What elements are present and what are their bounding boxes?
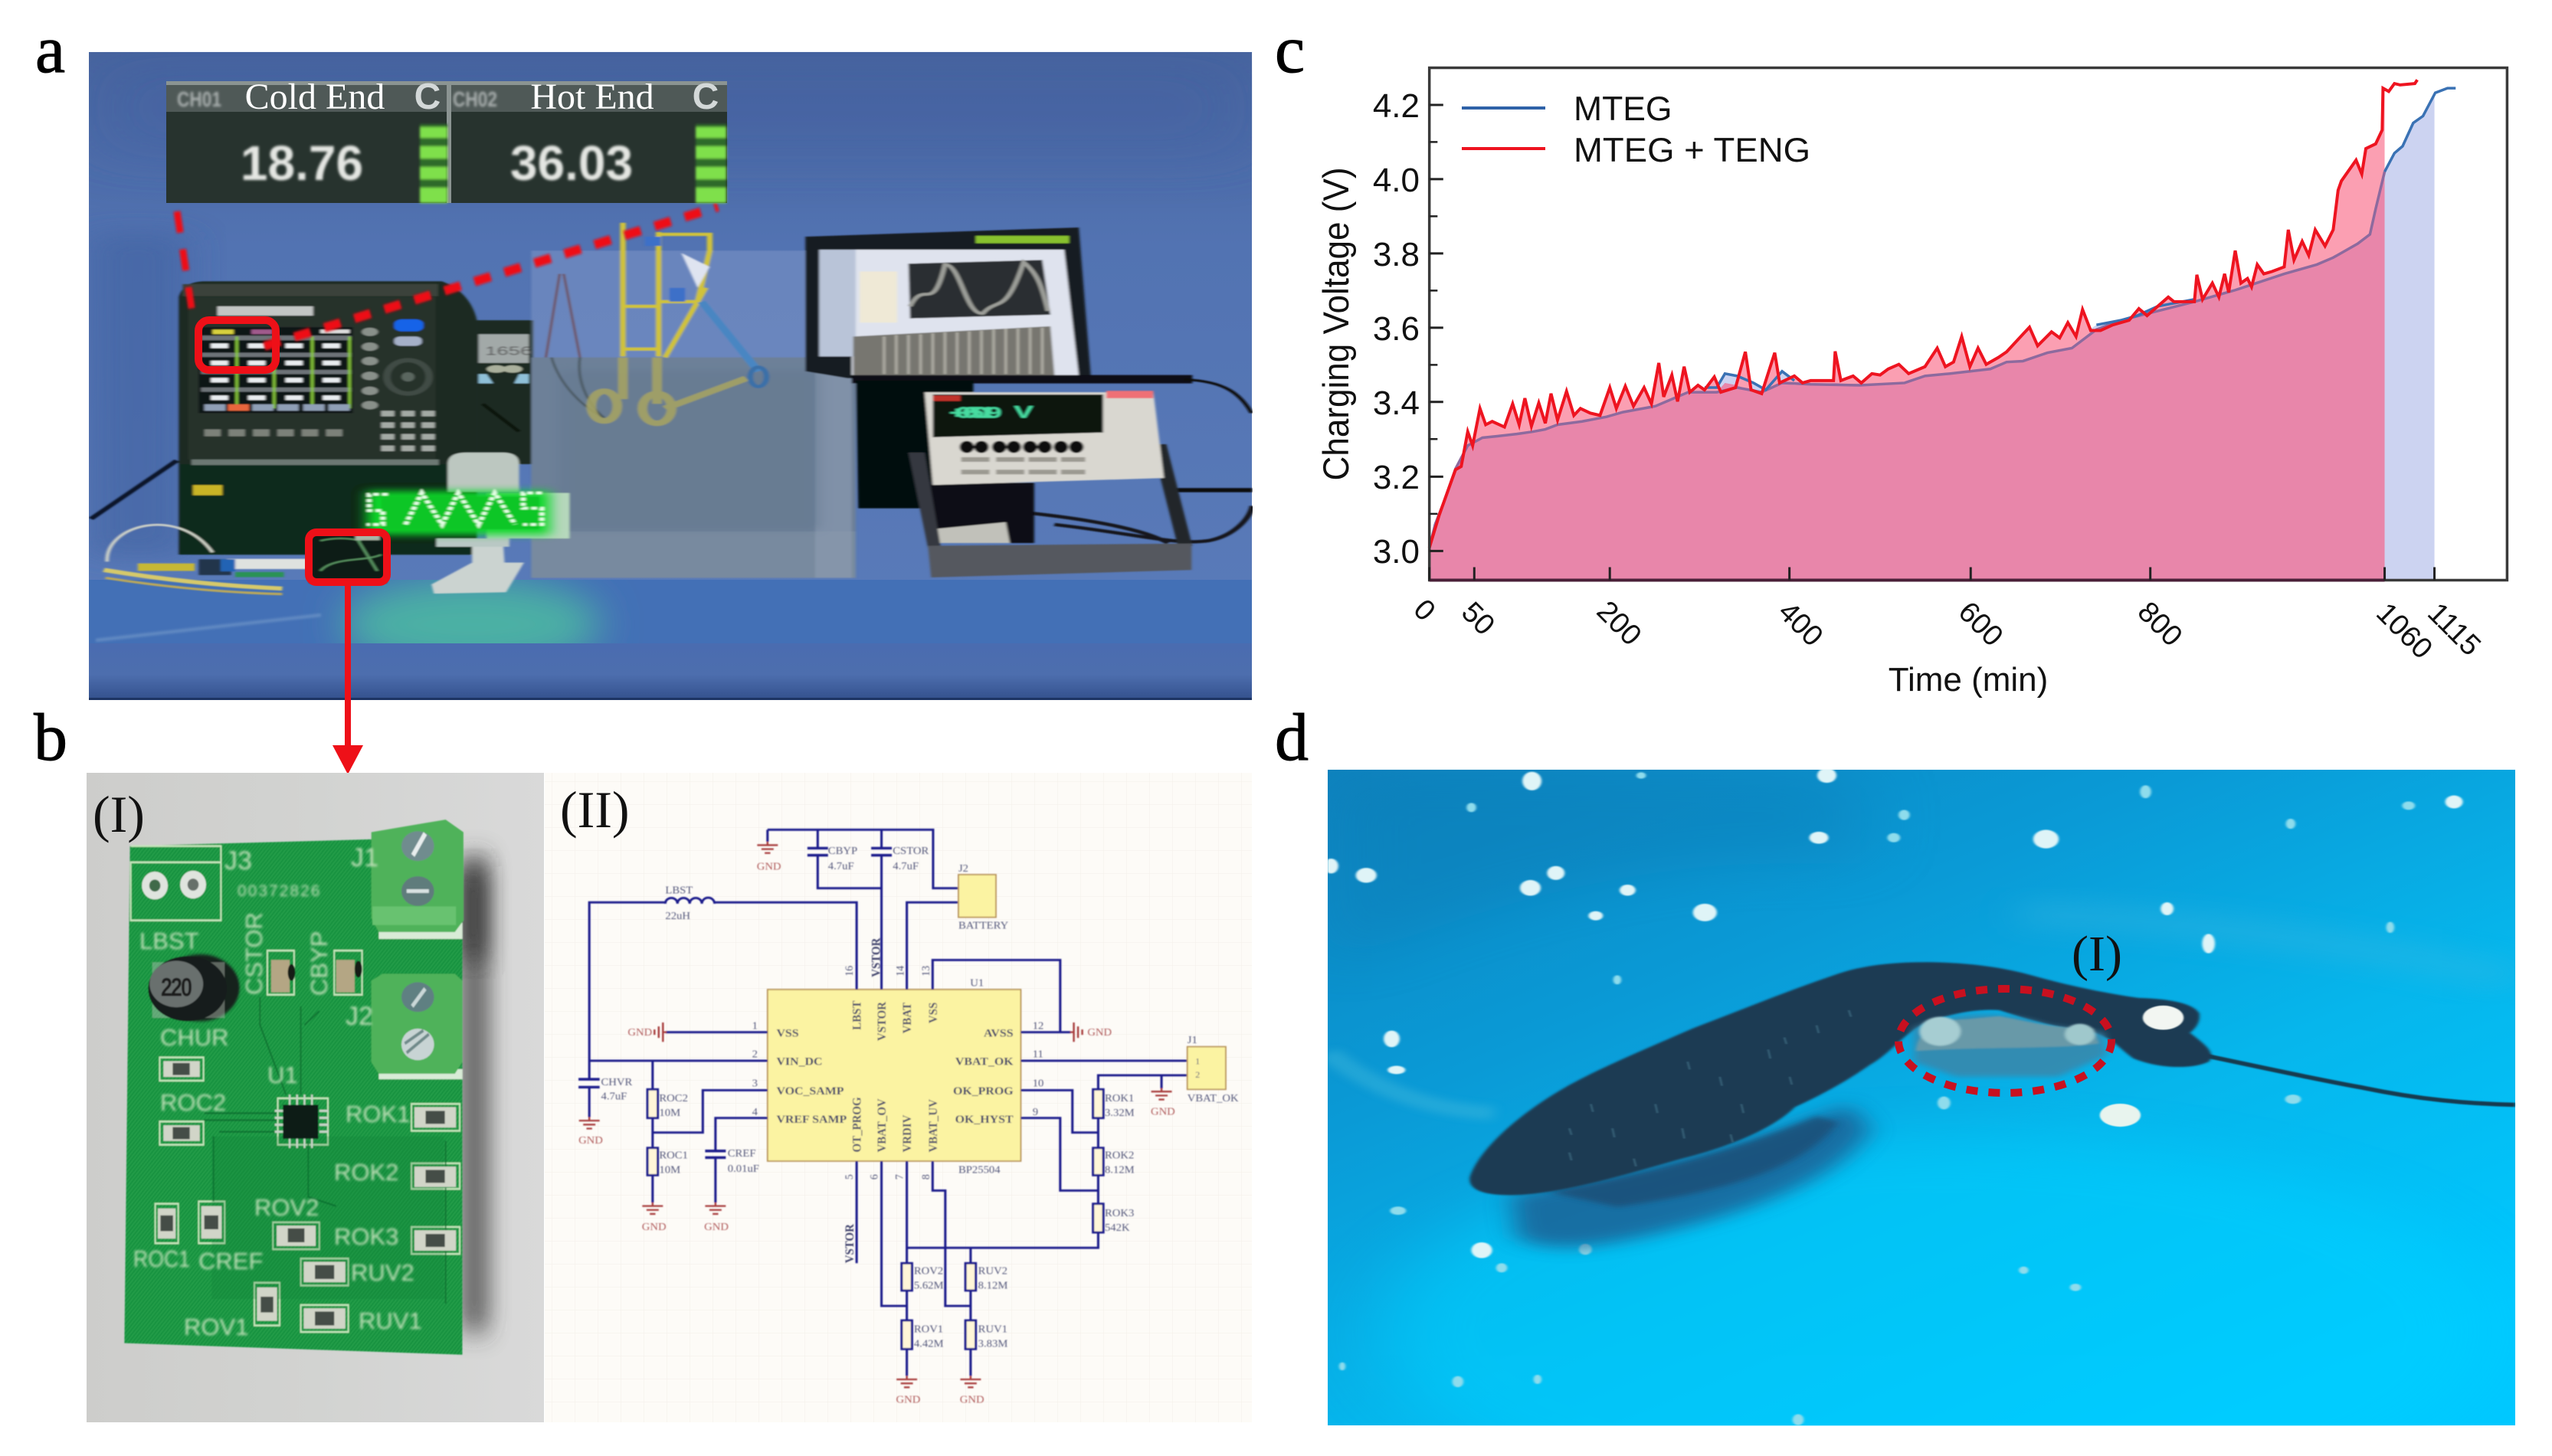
schematic text labels: VSS	[776, 1027, 799, 1039]
panel b(II): circuit schematic: 8.12M	[1105, 1164, 1135, 1176]
y-axis tick labels: 3.8	[1373, 236, 1420, 273]
value: hot end temperature: 36.03	[510, 136, 633, 191]
panel b(II): circuit schematic: LBST	[665, 885, 693, 897]
panel b(II): circuit schematic: GND	[578, 1134, 603, 1147]
terminal block J1	[372, 820, 464, 939]
panel b(II): circuit schematic	[545, 773, 1252, 1422]
schematic text labels: VBAT_OV	[876, 1098, 889, 1152]
line: MTEG	[1430, 88, 2455, 548]
silkscreen labels: J2	[346, 1002, 373, 1031]
y-axis tick labels: 3.2	[1373, 459, 1420, 496]
rat body	[1469, 962, 2211, 1195]
panel b(II): circuit schematic: 4.7uF	[828, 860, 854, 872]
panel b(II): circuit schematic: GND	[704, 1222, 729, 1233]
y-axis tick labels	[1373, 87, 1420, 571]
silkscreen labels: CREF	[198, 1248, 263, 1274]
air bubbles	[1324, 768, 2463, 1425]
sub-panel label: b(II): (II)	[560, 780, 630, 839]
heading: Hot End: Hot End	[530, 77, 654, 117]
panel b(II): circuit schematic: 10M	[659, 1107, 680, 1119]
silkscreen labels: ROV2	[254, 1194, 319, 1221]
silkscreen labels: U1	[267, 1062, 298, 1088]
panel b(II): circuit schematic: BP25504	[958, 1164, 1001, 1176]
schematic text labels: VRDIV	[901, 1115, 914, 1152]
circuit wiring	[578, 829, 1188, 1376]
x-axis tick labels: 1060	[2370, 597, 2439, 666]
schematic text labels: AVSS	[984, 1027, 1014, 1039]
x-axis tick labels: 50	[1455, 596, 1501, 642]
panel label: a: a	[35, 13, 65, 87]
panel b(II): circuit schematic: 542K	[1105, 1222, 1130, 1234]
panel b(II): circuit schematic: RUV2	[978, 1265, 1007, 1278]
y-axis title: Charging Voltage (V)	[1315, 167, 1356, 481]
panel label: b: b	[34, 701, 67, 775]
red dashed circle	[1898, 989, 2111, 1093]
area under MTEG + TENG	[1430, 88, 2385, 580]
panel b(II): circuit schematic: GND	[642, 1222, 667, 1233]
schematic text labels: VREF SAMP	[776, 1113, 847, 1126]
tether cable	[2203, 1055, 2515, 1104]
digital multimeter with stand	[909, 380, 1253, 577]
panel b(II): circuit schematic: ROK2	[1105, 1150, 1134, 1161]
area under MTEG	[1430, 95, 2435, 581]
panel b(II): circuit schematic: 2	[752, 1049, 758, 1060]
silkscreen labels: ROV1	[184, 1314, 248, 1340]
panel b(II): circuit schematic: GND	[1087, 1027, 1112, 1039]
panel b(II): circuit schematic: 4.42M	[914, 1338, 944, 1350]
callout label (I): (I)	[2072, 926, 2122, 982]
panel b(II): circuit schematic: GND	[757, 861, 781, 872]
SMD components	[158, 960, 456, 1329]
panel b(II): circuit schematic: CREF	[728, 1148, 756, 1160]
digital multimeter with stand: V	[1014, 403, 1034, 421]
panel b(II): circuit schematic: 8.12M	[978, 1280, 1008, 1291]
inductor LBST: 220	[161, 973, 192, 1002]
inset: temperature readout	[166, 77, 727, 203]
J3 connector pads	[142, 871, 206, 899]
panel b(II): circuit schematic: 4	[752, 1107, 758, 1118]
x-axis tick labels: 600	[1952, 596, 2009, 653]
schematic text labels: OK_HYST	[955, 1113, 1014, 1126]
LED array display on stand	[367, 453, 569, 594]
x-axis tick labels	[1407, 594, 2487, 666]
silkscreen labels: ROC2	[160, 1089, 226, 1116]
schematic text labels: VBAT_OK	[955, 1055, 1014, 1068]
y-axis tick labels: 3.4	[1373, 384, 1420, 422]
panel b(II): circuit schematic: ROC2	[659, 1092, 688, 1104]
panel b(II): circuit schematic: 4.7uF	[601, 1091, 627, 1102]
IC U1	[275, 1094, 329, 1148]
panel b(II): circuit schematic: GND	[627, 1027, 652, 1039]
water tank with fish robot	[531, 223, 856, 577]
x-axis tick labels: 800	[2131, 596, 2188, 653]
panel b(II): circuit schematic: ROK1	[1105, 1092, 1134, 1104]
rat shadow	[1510, 1104, 1870, 1248]
panel b(II): circuit schematic: ROK3	[1105, 1207, 1134, 1219]
silkscreen labels: CSTOR	[241, 912, 267, 995]
panel b(II): circuit schematic: VBAT_OK	[1188, 1092, 1239, 1104]
y-axis tick labels: 3.0	[1373, 533, 1420, 571]
panel b(II): circuit schematic: 3.83M	[978, 1338, 1008, 1350]
water gradient bands	[1328, 770, 2515, 1456]
schematic text labels: OT_PROG	[850, 1097, 864, 1152]
schematic text labels: VIN_DC	[776, 1055, 823, 1068]
panel b(II): circuit schematic: GND	[960, 1394, 984, 1405]
silkscreen labels: ROK1	[346, 1101, 410, 1127]
laptop with waveform	[805, 227, 1192, 509]
schematic text labels: VSTOR	[876, 1001, 889, 1041]
channel tag CH01: CH01	[177, 87, 221, 111]
schematic text labels	[776, 937, 1014, 1263]
schematic text labels: VSTOR	[870, 937, 883, 977]
red highlight box: circuit	[309, 532, 387, 582]
fur speckles	[1569, 1010, 1851, 1166]
panel b(II): circuit schematic: 1	[752, 1020, 758, 1032]
panel b(II): circuit schematic: 16	[844, 966, 856, 977]
silkscreen labels: J1	[351, 843, 378, 872]
panel a: experimental setup photo	[89, 52, 1253, 700]
panel b(II): circuit schematic: 14	[894, 966, 906, 977]
wires and clips on the table	[91, 460, 308, 594]
resistor symbols	[647, 1089, 1103, 1349]
x-axis title: Time (min)	[1889, 661, 2048, 699]
legend: MTEG + TENG	[1574, 132, 1810, 169]
line: MTEG + TENG	[1430, 80, 2417, 548]
silkscreen labels: ROC1	[133, 1245, 190, 1272]
panel b(II): circuit schematic: GND	[896, 1394, 920, 1405]
data logger instrument	[179, 281, 534, 555]
unit glyph: C	[693, 77, 719, 117]
x-axis tick labels: 400	[1772, 596, 1829, 653]
inductor LBST	[148, 954, 240, 1021]
legend: MTEG	[1574, 90, 1672, 128]
legend	[1462, 90, 1810, 169]
overlap area	[1430, 172, 2385, 581]
schematic text labels: VBAT_UV	[926, 1099, 940, 1152]
channel tag CH02: CH02	[453, 87, 497, 111]
panel b(II): circuit schematic: 6	[868, 1174, 881, 1180]
panel label: c: c	[1275, 13, 1305, 87]
digital multimeter with stand: +005.019	[949, 404, 1001, 421]
sub-panel label: b(I): (I)	[93, 785, 145, 843]
panel b(II): circuit schematic: 10M	[659, 1164, 680, 1176]
implant region	[1913, 1015, 2107, 1077]
x-axis tick labels: 0	[1407, 594, 1441, 627]
schematic text labels: OK_PROG	[953, 1085, 1014, 1098]
terminal block J2	[372, 973, 462, 1079]
panel c: charging voltage chart	[1315, 67, 2507, 699]
schematic text labels: LBST	[850, 1000, 864, 1030]
x-axis tick labels: 200	[1590, 595, 1647, 652]
panel b(II): circuit schematic: 0.01uF	[728, 1163, 759, 1175]
panel b(II): circuit schematic: 3.32M	[1105, 1107, 1135, 1119]
PCB under test with wires	[310, 532, 386, 584]
data logger instrument: 1656	[485, 345, 532, 358]
arrow: circuit to panel b	[333, 585, 363, 774]
panel b(II): circuit schematic: CSTOR	[893, 845, 929, 857]
panel b(II): circuit schematic: U1	[970, 977, 984, 989]
panel b(II): circuit schematic: ROC1	[659, 1150, 688, 1161]
chart axes frame and ticks	[1430, 67, 2507, 580]
red dashed zoom guide lines	[177, 207, 718, 346]
silkscreen labels: CBYP	[306, 931, 333, 996]
silkscreen labels: CHUR	[160, 1024, 229, 1051]
schematic text labels: VSS	[926, 1003, 940, 1023]
panel b(II): circuit schematic: 5	[844, 1174, 856, 1180]
y-axis tick labels: 4.0	[1373, 162, 1420, 199]
panel b(II): circuit schematic: 22uH	[665, 910, 690, 922]
panel b(I): PCB photo	[87, 773, 544, 1422]
chip U1	[768, 990, 1020, 1161]
bubble near head	[2100, 1104, 2141, 1127]
silkscreen labels: ROK2	[334, 1159, 398, 1186]
panel b(II): circuit schematic: GND	[1151, 1106, 1175, 1118]
panel b(II): circuit schematic: CBYP	[828, 845, 857, 857]
silkscreen labels: ROK3	[334, 1223, 398, 1250]
panel b(II): circuit schematic: 13	[920, 966, 932, 977]
y-axis tick labels: 4.2	[1373, 87, 1420, 125]
panel b(II): circuit schematic: 1	[1195, 1056, 1200, 1066]
panel b(II): circuit schematic: J2	[958, 862, 968, 875]
panel b(II): circuit schematic: 8	[920, 1174, 932, 1180]
panel b(II): circuit schematic: BATTERY	[958, 920, 1008, 931]
panel b(II): circuit schematic: 9	[1033, 1107, 1038, 1118]
silkscreen labels: J3	[224, 846, 252, 875]
panel b(II): circuit schematic: CHVR	[601, 1077, 633, 1088]
silkscreen labels: RUV2	[351, 1259, 414, 1286]
panel d: rat swimming photo	[1324, 768, 2515, 1456]
panel b(II): circuit schematic: 4.7uF	[893, 860, 919, 872]
connectors J1 and J2	[958, 875, 1226, 1089]
panel label: d: d	[1275, 701, 1309, 775]
unit glyph: C	[414, 77, 441, 117]
panel b(II): circuit schematic: 10	[1033, 1078, 1043, 1089]
panel b(II): circuit schematic: 3	[752, 1078, 758, 1089]
panel b(II): circuit schematic: ROV2	[914, 1265, 943, 1278]
value: cold end temperature: 18.76	[241, 136, 363, 191]
panel b(II): circuit schematic: 12	[1033, 1020, 1043, 1032]
panel b(II): circuit schematic: 5.62M	[914, 1280, 944, 1291]
ground symbols	[579, 842, 1172, 1387]
panel b(II): circuit schematic: J1	[1188, 1034, 1197, 1046]
marker on head	[2143, 1006, 2183, 1030]
schematic text labels: VOC_SAMP	[776, 1085, 844, 1098]
silkscreen labels: LBST	[139, 928, 199, 954]
panel b(II): circuit schematic: 7	[893, 1174, 906, 1180]
panel b(II): circuit schematic: 11	[1033, 1049, 1043, 1060]
schematic text labels: VBAT	[901, 1002, 914, 1033]
panel b(II): circuit schematic: 2	[1195, 1069, 1200, 1080]
panel b(II): circuit schematic: RUV1	[978, 1323, 1007, 1335]
silkscreen labels: RUV1	[359, 1307, 422, 1334]
heading: Cold End: Cold End	[245, 77, 385, 117]
silkscreen labels	[133, 843, 422, 1340]
y-axis tick labels: 3.6	[1373, 310, 1420, 348]
rat	[1469, 962, 2211, 1248]
panel b(II): circuit schematic: ROV1	[914, 1323, 943, 1335]
silkscreen labels: 00372826	[238, 882, 321, 900]
red highlight box: thermometer channels	[198, 320, 276, 370]
x-axis tick labels: 1115	[2421, 597, 2487, 663]
table surface	[89, 578, 1252, 700]
schematic text labels: VSTOR	[843, 1223, 857, 1263]
